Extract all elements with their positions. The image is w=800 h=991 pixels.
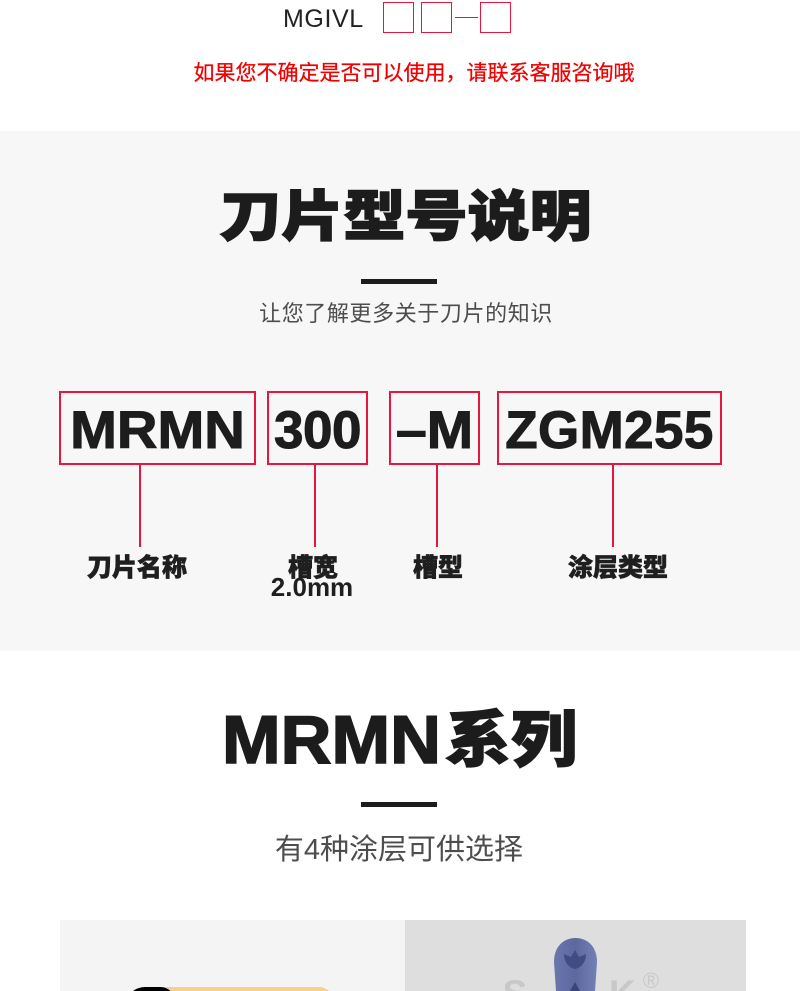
dash — [455, 17, 478, 18]
code box: ZGM255 — [497, 391, 722, 465]
code text: MRMN: MRMN — [70, 401, 245, 460]
blank box 3 — [480, 2, 511, 33]
label: groove width value: 2.0mm — [271, 572, 353, 602]
blue blade — [554, 938, 597, 991]
blank box 2 — [421, 2, 452, 33]
label: coating type: 涂层类型 — [568, 548, 668, 584]
code box: -M — [389, 391, 480, 465]
top model code row — [283, 2, 511, 33]
blade body gold — [150, 987, 333, 991]
code box: MRMN — [59, 391, 256, 465]
connector 1 — [139, 465, 141, 547]
heading: 刀片型号说明 — [219, 187, 592, 248]
label: groove width: 槽宽 — [288, 548, 338, 584]
heading chinese part: 系列 — [445, 706, 577, 774]
subheading: coatings: 有4种涂层可供选择 — [275, 834, 523, 866]
red notice: 如果您不确定是否可以使用，请联系客服咨询哦 — [194, 62, 634, 85]
subheading: 让您了解更多关于刀片的知识 — [259, 301, 553, 326]
connector 4 — [612, 465, 614, 547]
connector 2 — [314, 465, 316, 547]
heading underline — [361, 802, 437, 807]
code box: 300 — [267, 391, 368, 465]
code text: -M: –M — [396, 401, 473, 460]
blank box 1 — [383, 2, 414, 33]
model name: MGIVL — [283, 5, 364, 33]
panel: coating photo left — [60, 920, 405, 991]
code text: 300: 300 — [274, 401, 361, 460]
panel: blade model explanation — [0, 131, 800, 651]
blade tip black — [125, 987, 175, 991]
label: groove type: 槽型 — [413, 548, 463, 584]
heading: MRMN series — [222, 702, 577, 778]
heading underline — [361, 279, 437, 284]
connector 3 — [436, 465, 438, 547]
code text: ZGM255: ZGM255 — [505, 401, 714, 460]
heading latin part: MRMN — [222, 702, 441, 778]
label: blade name: 刀片名称 — [87, 548, 187, 584]
panel: coating photo right — [405, 920, 746, 991]
